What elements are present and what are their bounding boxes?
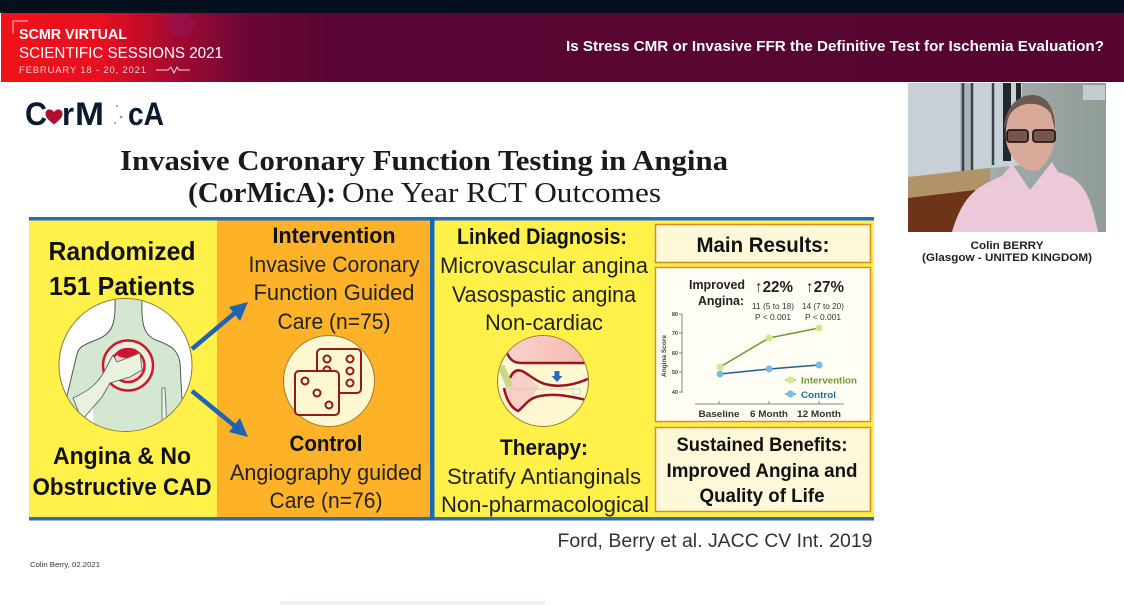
arrow: to control	[192, 391, 248, 437]
slide title: One Year RCT Outcomes	[342, 178, 661, 209]
panel: diagnosis and therapy: Vasospastic angina	[452, 282, 637, 307]
panel: diagnosis and therapy: Stratify Antianginals	[447, 464, 641, 489]
footer note: Colin Berry, 02.2021	[30, 562, 100, 569]
header banner	[1, 13, 1124, 82]
header banner: SCIENTIFIC SESSIONS 2021	[19, 45, 223, 62]
chart: improved angina line chart: 50	[672, 370, 678, 376]
icon: dice	[284, 336, 374, 426]
heading: intervention: Intervention	[272, 223, 396, 248]
chart: improved angina line chart: Angina Score	[661, 335, 668, 377]
chart: improved angina line chart: P < 0.001	[805, 312, 841, 322]
arrow: to intervention	[192, 302, 248, 349]
box: main results: Main Results:	[696, 233, 830, 257]
citation: Ford, Berry et al. JACC CV Int. 2019	[558, 531, 872, 552]
series: intervention	[716, 324, 822, 370]
CorMicA logo	[25, 96, 164, 132]
panel: study arms: Invasive Coronary	[248, 252, 420, 277]
chart: improved angina line chart: ↑27%	[806, 279, 844, 296]
CorMicA logo: cA	[128, 96, 164, 132]
chart: improved angina line chart: P < 0.001	[755, 312, 791, 322]
chart: improved angina line chart: 80	[672, 312, 678, 318]
panel frame lines	[29, 217, 874, 520]
legend	[785, 376, 857, 401]
event title: SCMR VIRTUAL	[19, 26, 127, 43]
panel: study arms	[217, 219, 430, 518]
panel: diagnosis and therapy: Microvascular angina	[440, 253, 649, 278]
chart: improved angina line chart: 40	[672, 390, 678, 396]
slide title: (CorMicA):	[188, 178, 336, 209]
box: sustained benefits: Sustained Benefits:	[676, 434, 848, 456]
CorMicA logo: r	[62, 96, 74, 132]
chart: improved angina line chart: 6 Month	[750, 409, 788, 420]
heading: randomized: Randomized	[48, 236, 196, 266]
chart: improved angina line chart: 12 Month	[797, 409, 841, 420]
head	[1006, 97, 1055, 171]
desk	[908, 168, 990, 198]
heading: therapy: Therapy:	[500, 435, 588, 460]
panel: study arms: Care (n=76)	[270, 488, 382, 513]
slide title	[120, 146, 728, 209]
panel: diagnosis and therapy	[434, 219, 874, 518]
top dark bar	[0, 0, 1124, 13]
speaker name: (Glasgow - UNITED KINGDOM)	[922, 252, 1092, 264]
chart: improved angina line chart: ↑22%	[755, 279, 793, 296]
series: control	[716, 362, 822, 378]
panel: randomized patients: Obstructive CAD	[32, 474, 212, 501]
chart: improved angina line chart: Baseline	[698, 409, 740, 420]
heading: control: Control	[290, 431, 362, 456]
chart heading: Improved	[689, 278, 745, 292]
CorMicA logo: M	[75, 96, 104, 132]
glasses	[1007, 130, 1028, 142]
icon: chest with angina	[58, 298, 192, 432]
text: angina and no obstructive CAD: Angina & No	[53, 443, 191, 470]
box: sustained benefits: Improved Angina and	[666, 460, 858, 482]
session title: Is Stress CMR or Invasive FFR the Definitive Test for Ischemia Evaluation?	[566, 39, 1104, 55]
legend: Intervention	[801, 376, 857, 386]
chart: improved angina line chart: 14 (7 to 20)	[802, 301, 844, 311]
speaker video	[908, 83, 1106, 232]
faint bottom strip	[280, 601, 545, 605]
slide title: Invasive Coronary Function Testing in Angina	[120, 146, 728, 177]
axes	[679, 314, 844, 404]
chart: improved angina line chart: 11 (5 to 18)	[752, 301, 794, 311]
chart: improved angina line chart	[656, 268, 870, 422]
chart: improved angina line chart: Angina:	[698, 294, 744, 308]
chart: improved angina line chart: 60	[672, 351, 678, 357]
heading: linked diagnosis: Linked Diagnosis:	[457, 224, 627, 249]
panel: randomized patients	[29, 219, 217, 518]
panel: randomized patients: 151 Patients	[49, 271, 195, 301]
panel: study arms: Function Guided	[254, 280, 414, 305]
panel: diagnosis and therapy: Non-cardiac	[485, 310, 603, 335]
box: main results	[656, 224, 870, 262]
box: sustained benefits	[656, 428, 870, 512]
panel: study arms: Angiography guided	[230, 460, 422, 485]
speaker name	[922, 240, 1092, 264]
shirt	[952, 162, 1098, 232]
event date: FEBRUARY 18 - 20, 2021	[19, 65, 146, 76]
speaker name: Colin BERRY	[970, 240, 1044, 252]
blinds	[908, 83, 1022, 177]
box: sustained benefits: Quality of Life	[700, 485, 825, 507]
chart: improved angina line chart: 70	[672, 331, 678, 337]
panel: diagnosis and therapy: Non-pharmacological	[441, 492, 649, 517]
CorMicA logo: C	[25, 96, 47, 132]
icon: coronary vessel	[498, 330, 590, 426]
legend: Control	[801, 390, 836, 401]
panel: study arms: Care (n=75)	[278, 309, 390, 334]
